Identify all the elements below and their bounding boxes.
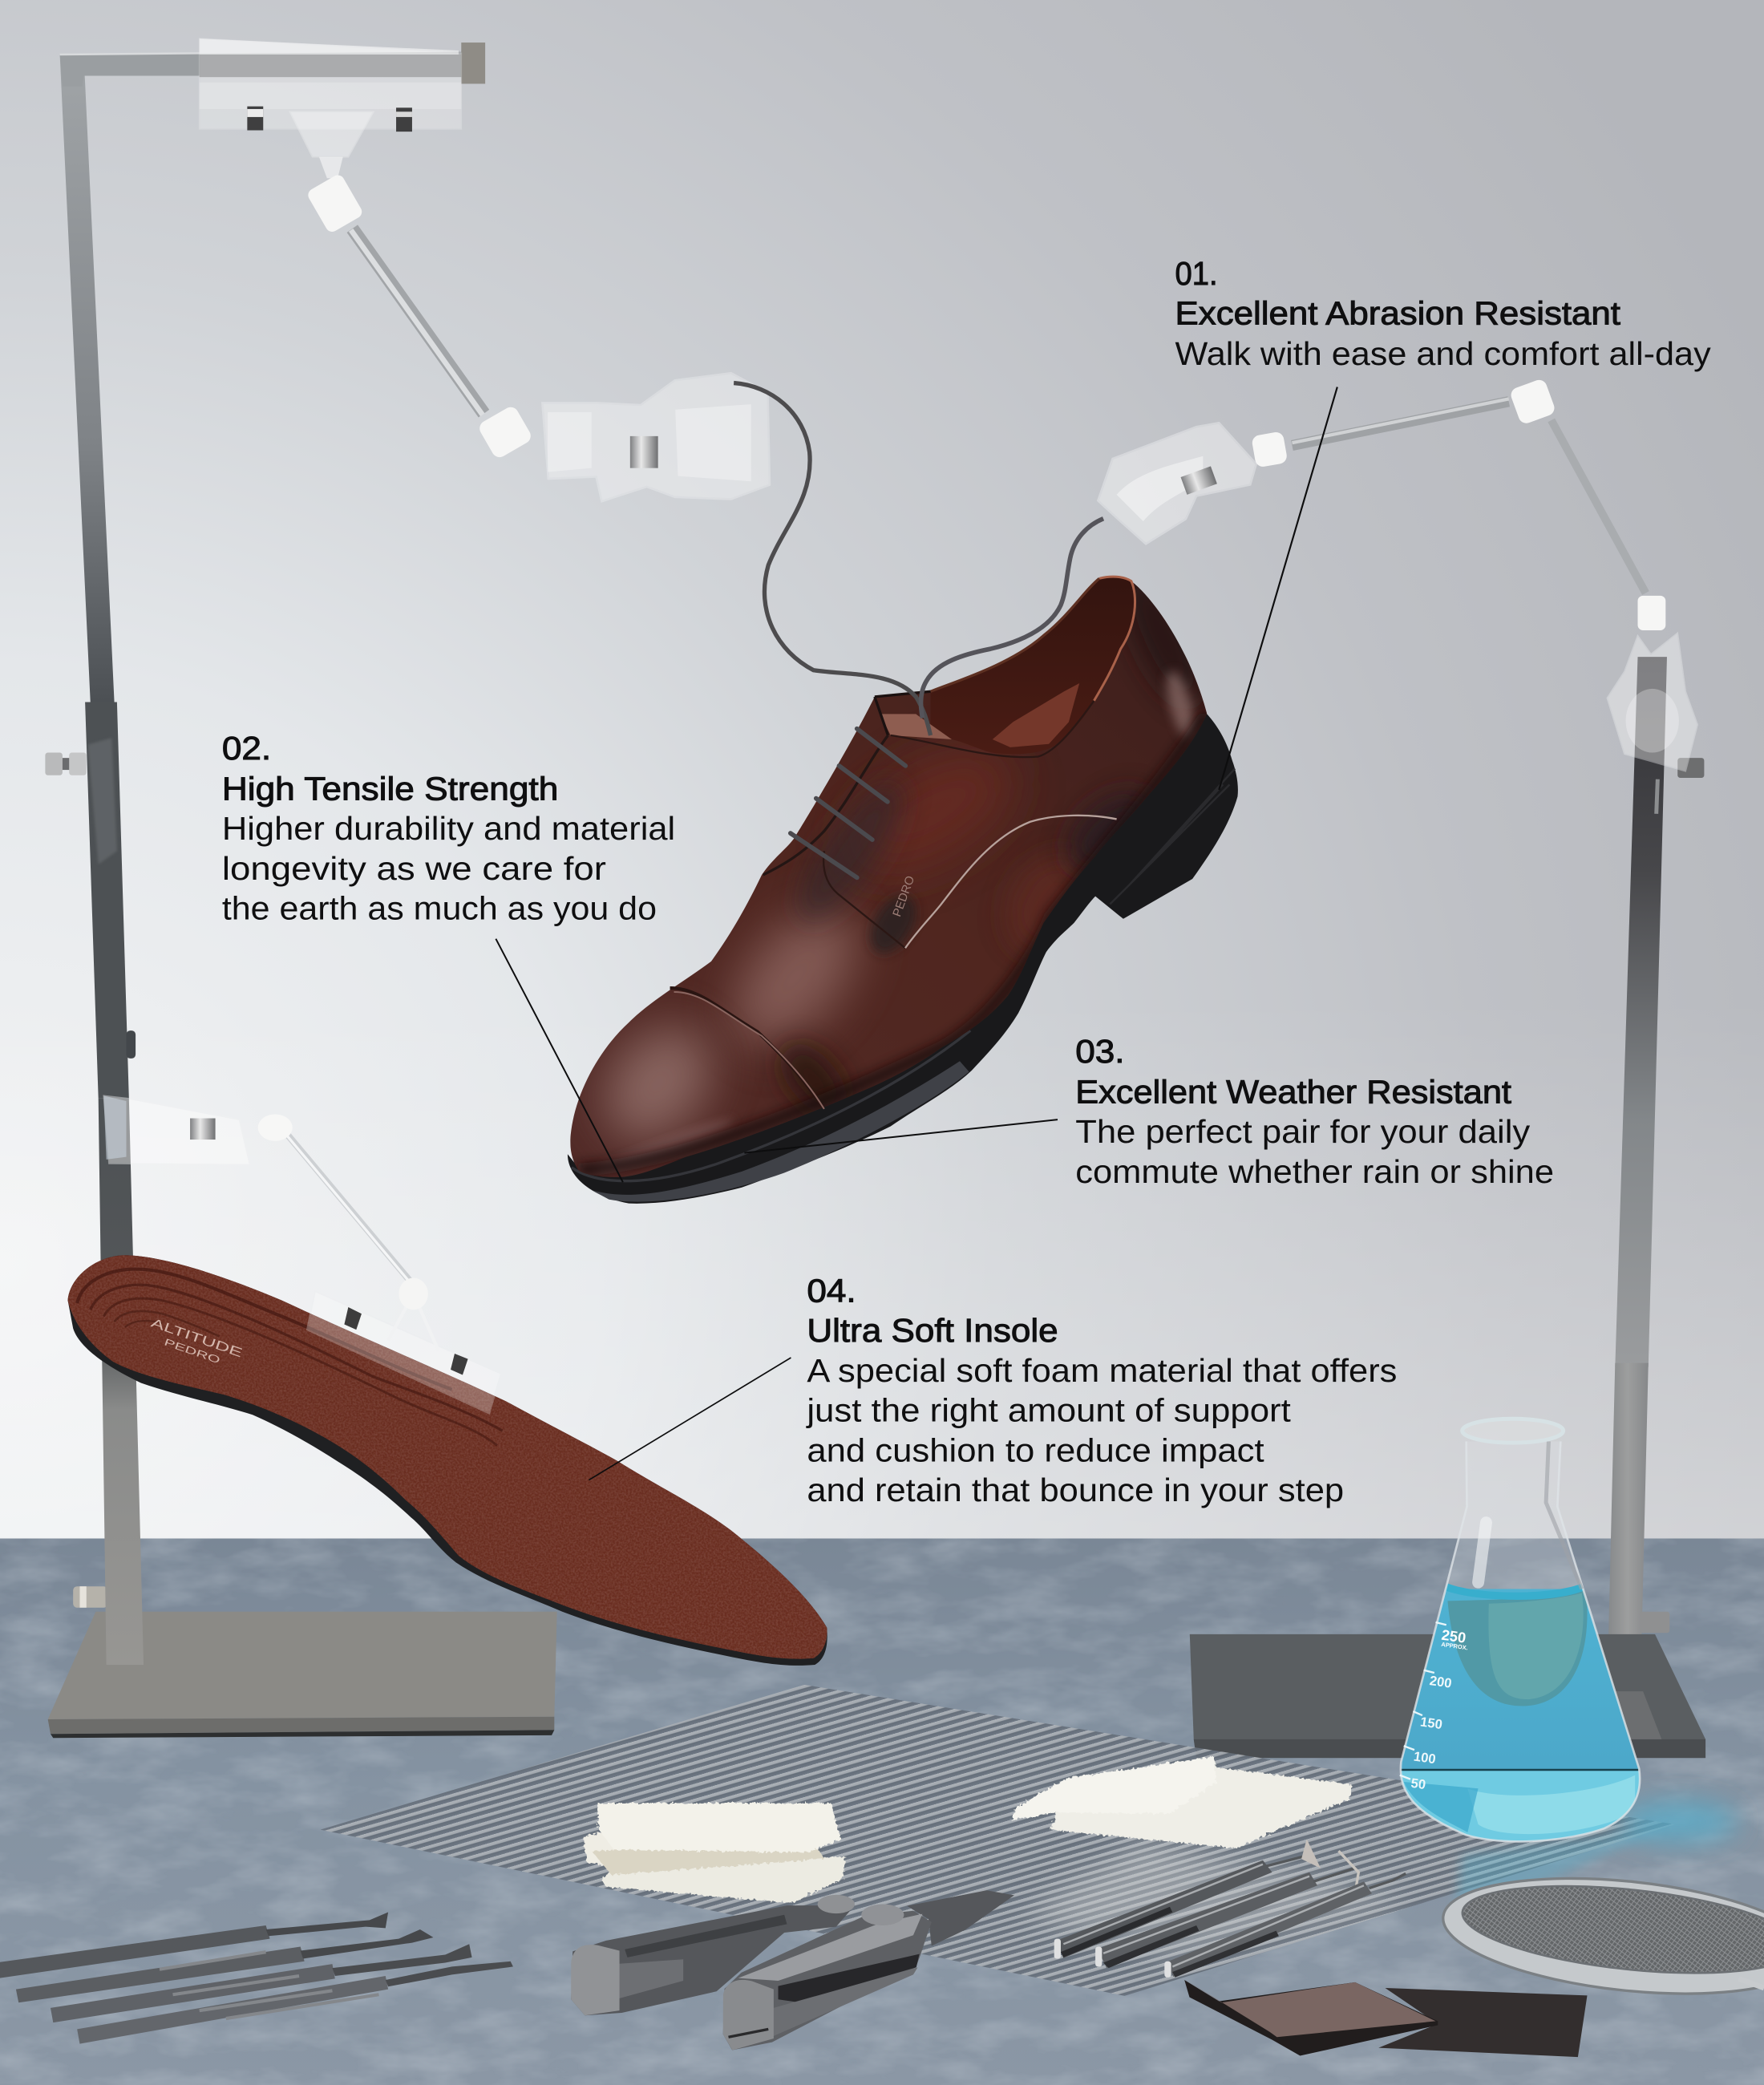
- callout 02: Higher durability and material: [222, 810, 675, 847]
- left lace clip: [542, 373, 770, 501]
- flask blue shadow: [1616, 1800, 1739, 1843]
- leader line 03: [744, 1119, 1058, 1153]
- left stand upright: [45, 55, 144, 1665]
- shoe laces: [791, 729, 905, 877]
- upper arm: [305, 172, 533, 460]
- background wall: [0, 0, 1764, 1553]
- callout 01: [1175, 255, 1711, 372]
- callout 04: 04.: [807, 1272, 856, 1309]
- left stand base: [48, 1612, 557, 1738]
- callout 04: [806, 1272, 1397, 1508]
- leader line 01: [1219, 387, 1337, 790]
- callout 03: The perfect pair for your daily: [1075, 1113, 1531, 1150]
- callout 03: [1075, 1033, 1554, 1190]
- foam pieces left: [584, 1803, 845, 1903]
- leather swatches: [1184, 1980, 1588, 2057]
- right picks: [1054, 1839, 1406, 1978]
- callout 01: 01.: [1175, 255, 1218, 292]
- insole brand text: PEDRO: [163, 1336, 222, 1366]
- multitool handle A: [571, 1905, 855, 2015]
- flask graduations: 250: [1441, 1626, 1467, 1646]
- multitool jaws: [907, 1890, 1014, 1946]
- multitool handle B: [723, 1911, 932, 2051]
- sieve handle: [1739, 1978, 1764, 1988]
- flask graduations: [1400, 1622, 1468, 1792]
- shoe upper: [558, 561, 1223, 1184]
- callout 04: and retain that bounce in your step: [807, 1472, 1344, 1508]
- flask: [1382, 1419, 1649, 1855]
- right stand base: [1190, 1634, 1705, 1758]
- callout 04: A special soft foam material that offers: [807, 1352, 1397, 1389]
- callout 02: longevity as we care for: [222, 850, 606, 887]
- callout 03: 03.: [1075, 1033, 1125, 1070]
- table surface: [0, 1538, 1764, 2085]
- right stand upright: [1607, 657, 1704, 1691]
- left stand nut: [73, 1586, 107, 1608]
- lace: left strand: [734, 383, 931, 735]
- shoe tongue: [880, 714, 952, 739]
- insole brand text: [145, 1316, 244, 1372]
- callout 02: [222, 730, 675, 927]
- right lace clip: [1098, 423, 1256, 544]
- callout 04: and cushion to reduce impact: [807, 1431, 1264, 1468]
- callout 03: commute whether rain or shine: [1075, 1153, 1554, 1190]
- flask graduations: 150: [1419, 1714, 1443, 1732]
- left sculpting tools: [0, 1912, 513, 2044]
- flask graduations: 100: [1413, 1749, 1437, 1767]
- callout 02: the earth as much as you do: [222, 890, 657, 927]
- flask graduations: 200: [1429, 1673, 1453, 1691]
- callout 01: Walk with ease and comfort all-day: [1175, 335, 1711, 372]
- shoe sole: [568, 714, 1238, 1204]
- left stand top bar: [60, 43, 485, 87]
- shoe logo: PEDRO: [890, 874, 917, 919]
- callout 01: Excellent Abrasion Resistant: [1175, 295, 1620, 332]
- callout 02: High Tensile Strength: [222, 770, 558, 807]
- far right clip: [1607, 633, 1697, 771]
- ribbed sheet: [321, 1685, 1675, 1996]
- top clip: [200, 38, 461, 178]
- callout 04: just the right amount of support: [806, 1392, 1291, 1429]
- insole: [68, 1255, 827, 1666]
- callout 04: Ultra Soft Insole: [807, 1312, 1058, 1349]
- lower clip holder: [103, 1095, 411, 1281]
- flask graduations: 50: [1410, 1775, 1426, 1792]
- shoe stitching and seams: [670, 691, 1117, 1109]
- shoe: [558, 561, 1238, 1204]
- sieve: [1438, 1862, 1764, 2010]
- insole brand text: ALTITUDE: [149, 1316, 244, 1360]
- foam pieces right: [1011, 1756, 1351, 1848]
- shoe interior: [931, 577, 1135, 754]
- callout 02: 02.: [222, 730, 271, 767]
- callout 03: Excellent Weather Resistant: [1075, 1073, 1511, 1110]
- flask graduations: APPROX.: [1441, 1641, 1468, 1651]
- insole clip: [307, 1277, 501, 1414]
- leader line 02: [496, 939, 623, 1182]
- lace: right strand: [920, 519, 1103, 718]
- right clip arm: [1251, 378, 1665, 630]
- multitool: [571, 1890, 1014, 2051]
- leader line 04: [589, 1358, 791, 1480]
